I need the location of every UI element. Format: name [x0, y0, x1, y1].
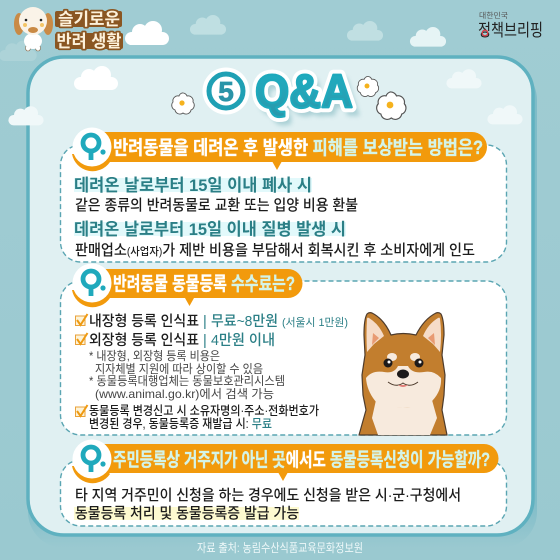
item: internal chip fee: (서울시 1만원) [282, 316, 348, 329]
answer 1a: 같은 종류의 반려동물로 교환 또는 입양 비용 환불 [75, 197, 358, 214]
answer box 3 [60, 460, 506, 526]
icon: dog mascot [14, 7, 53, 51]
item: reissue fee [76, 404, 319, 431]
title: 5 Q&A: Q&A [255, 64, 353, 118]
question banner 1: 반려동물을 데려온 후 발생한 피해를 보상받는 방법은? [113, 137, 483, 159]
answer 3 [74, 487, 461, 522]
notes [89, 349, 285, 401]
answer 1b [74, 220, 475, 259]
answer box 1 [60, 145, 506, 262]
notes: * 내장형, 외장형 등록 비용은 [89, 349, 220, 363]
item: internal chip fee: 내장형 등록 인식표 [89, 313, 199, 330]
item: reissue fee: 동물등록 변경신고 시 소유자명의·주소·전화번호가 [89, 404, 319, 418]
notes: 지자체별 지원에 따라 상이할 수 있음 [95, 362, 263, 376]
logo: policy briefing: 대한민국 [479, 10, 508, 20]
item: internal chip fee: | [203, 314, 207, 330]
title: 5 Q&A: Q&A [259, 70, 357, 123]
title: 5 Q&A: 5 [218, 76, 234, 107]
logo: policy briefing: 정책브리핑 [478, 21, 543, 40]
badge title [55, 10, 123, 51]
background clouds [0, 15, 446, 61]
answer 1b: 판매업소(사업자)가 제반 비용을 부담해서 회복시킨 후 소비자에게 인도 [75, 242, 475, 259]
panel: question 3 [60, 440, 506, 526]
answer box 2 [60, 281, 506, 435]
item: external chip fee [76, 332, 275, 349]
series badge: dog mascot and title [14, 7, 123, 51]
answer 3: 타 지역 거주민이 신청을 하는 경우에도 신청을 받은 시·군·구청에서 [75, 487, 461, 504]
illustration: shiba dog [359, 313, 447, 435]
main panel [28, 57, 537, 548]
item: internal chip fee: 무료~8만원 [211, 313, 278, 330]
title: 5 Q&A [202, 64, 357, 123]
answer 1b: 데려온 날로부터 15일 이내 질병 발생 시 [74, 220, 346, 239]
item: external chip fee: 외장형 등록 인식표 [89, 332, 199, 349]
notes: (www.animal.go.kr)에서 검색 가능 [95, 387, 274, 401]
panel: question 2 [60, 264, 506, 435]
question banner 2 [72, 264, 302, 307]
question banner 1 [72, 128, 487, 171]
answer 1a [74, 176, 358, 214]
answer 3: 동물등록 처리 및 동물등록증 발급 가능 [75, 505, 299, 522]
logo: policy briefing [478, 10, 543, 40]
badge title: 슬기로운 [58, 10, 120, 29]
item: reissue fee: 변경된 경우, 동물등록증 재발급 시: 무료 [89, 416, 272, 431]
badge title: 반려 생활 [56, 32, 122, 51]
question banner 3 [72, 440, 498, 483]
title: 5 Q&A: Q&A [255, 64, 353, 118]
decorative flowers [172, 76, 406, 119]
panel clouds [8, 66, 523, 125]
item: external chip fee: | [203, 333, 207, 349]
notes: * 동물등록대행업체는 동물보호관리시스템 [89, 373, 285, 388]
answer 1a: 데려온 날로부터 15일 이내 폐사 시 [74, 176, 312, 195]
source credit: 자료 출처: 농림수산식품교육문화정보원 [197, 541, 363, 555]
item: internal chip fee [76, 313, 348, 330]
panel: question 1 [60, 128, 506, 262]
question banner 2: 반려동물 동물등록 수수료는? [113, 273, 295, 295]
question banner 3: 주민등록상 거주지가 아닌 곳에서도 동물등록신청이 가능할까? [113, 449, 490, 471]
item: external chip fee: 4만원 이내 [211, 332, 275, 349]
